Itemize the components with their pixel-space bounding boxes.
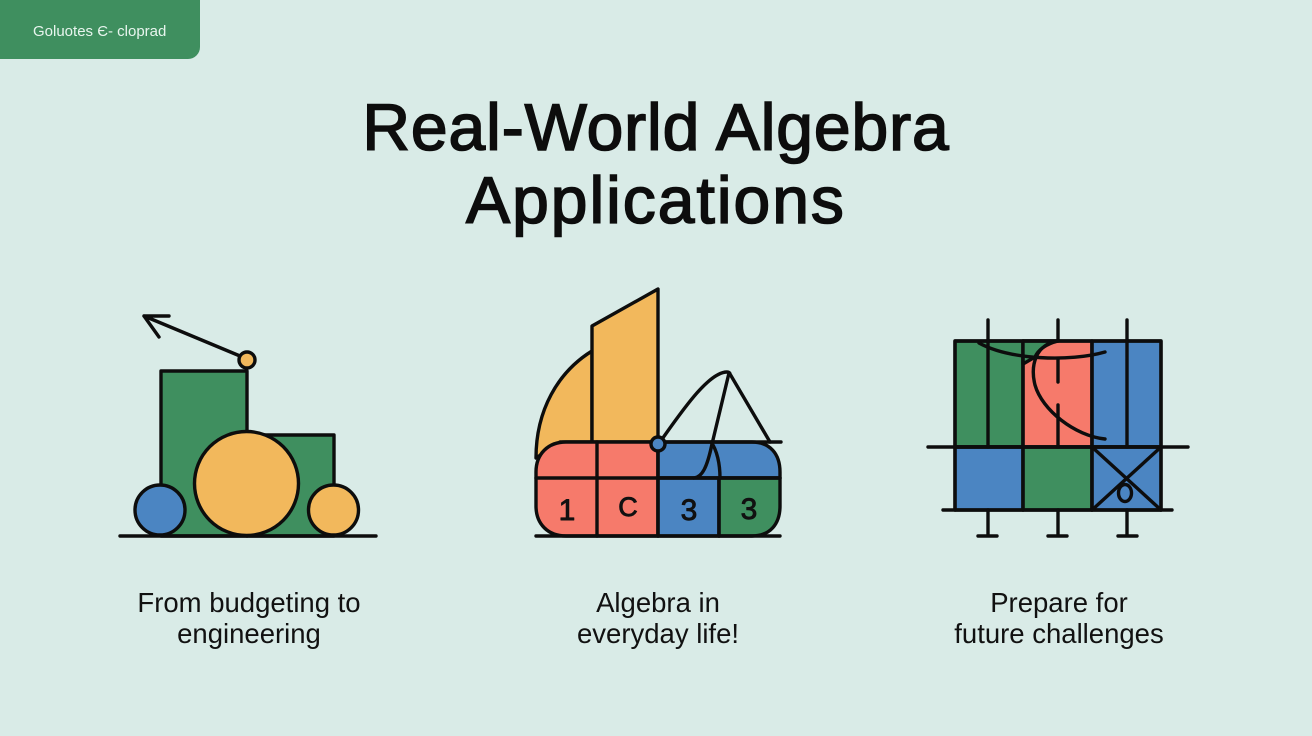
badge bbox=[0, 0, 200, 59]
caption: budgeting: engineering bbox=[177, 618, 321, 649]
title bbox=[362, 90, 950, 238]
grid numbers bbox=[559, 492, 757, 527]
icon: blocks and circles bbox=[120, 316, 376, 536]
caption: budgeting: From budgeting to bbox=[137, 587, 361, 618]
caption: future challenges bbox=[954, 587, 1164, 649]
grid numbers: C bbox=[618, 492, 638, 522]
grid numbers: 3 bbox=[681, 494, 697, 527]
caption: everyday life: everyday life! bbox=[577, 618, 739, 649]
caption: future challenges: future challenges bbox=[954, 618, 1164, 649]
caption: future challenges: Prepare for bbox=[990, 587, 1128, 618]
caption: everyday life: Algebra in bbox=[596, 587, 720, 618]
grid numbers: 3 bbox=[741, 493, 757, 526]
caption: budgeting bbox=[137, 587, 361, 649]
title: Applications bbox=[466, 163, 846, 237]
icon: colour grid with curves bbox=[928, 320, 1188, 536]
grid numbers: 1 bbox=[559, 494, 575, 527]
badge: Goluotes Є- cloprad bbox=[33, 23, 166, 40]
caption: everyday life bbox=[577, 587, 739, 649]
icon: shapes over number grid bbox=[536, 289, 781, 536]
title: Real-World Algebra bbox=[362, 90, 950, 164]
